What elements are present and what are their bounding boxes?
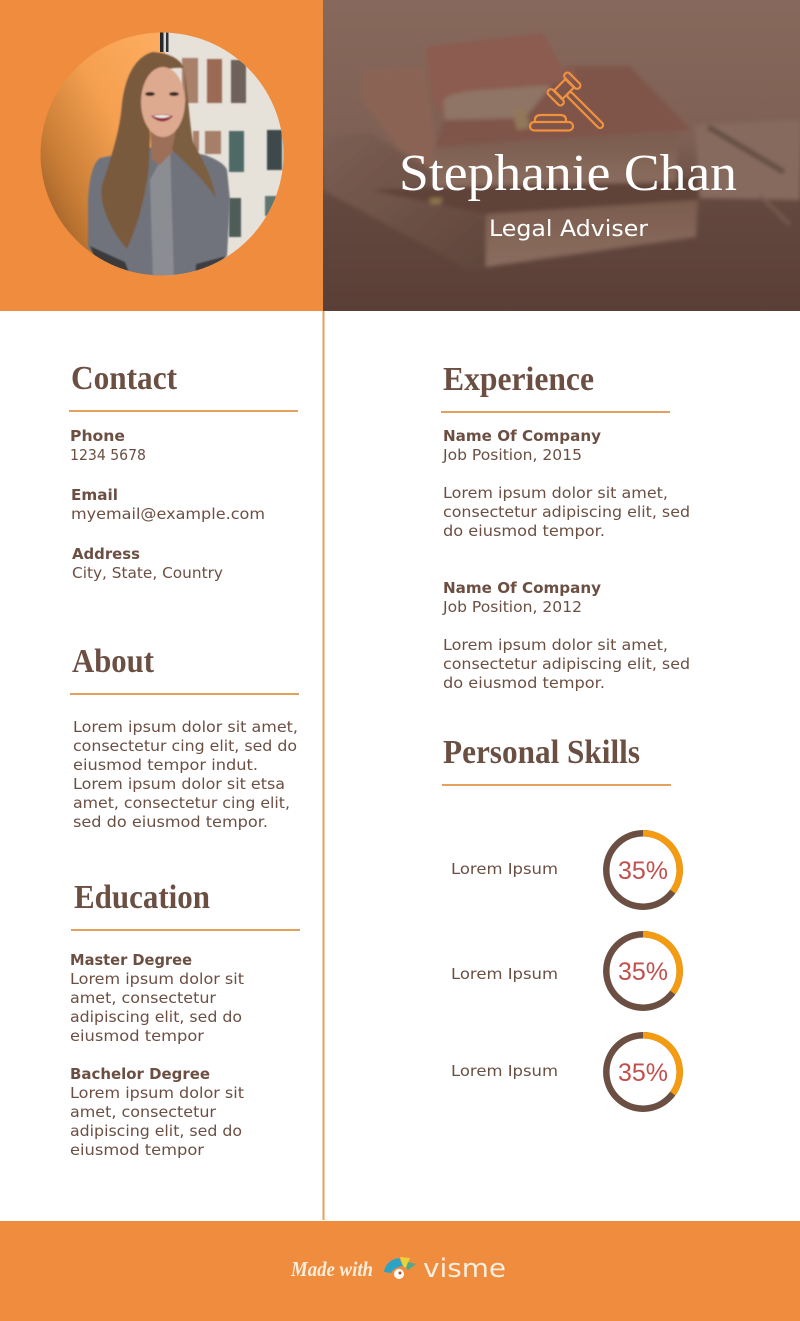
skill 3: 35% <box>618 1059 668 1087</box>
face <box>141 67 185 137</box>
skill 2: Lorem Ipsum <box>451 965 558 983</box>
education: master degree: Master Degree <box>70 951 192 969</box>
job entry 2012: Name Of Company <box>443 579 601 597</box>
education: bachelor degree: amet, consectetur <box>70 1103 217 1121</box>
education: bachelor degree <box>70 1065 244 1159</box>
panel: photo header <box>0 0 323 311</box>
background photo of books <box>323 33 800 270</box>
contact: address <box>72 545 223 582</box>
heading: education: Education <box>74 879 210 916</box>
contact: address: Address <box>72 545 140 563</box>
job entry 2012: Job Position, 2012 <box>442 598 582 616</box>
job entry 2012: do eiusmod tempor. <box>443 674 605 692</box>
portrait photo <box>40 30 286 280</box>
jacket <box>88 146 230 280</box>
job entry 2015: Lorem ipsum dolor sit amet, <box>443 484 668 502</box>
education: master degree: eiusmod tempor <box>70 1027 205 1045</box>
skill 1: Lorem Ipsum <box>451 860 558 878</box>
skill 1: 35% <box>618 857 668 885</box>
section: experience <box>441 361 690 692</box>
paper and pen <box>695 120 800 200</box>
column divider <box>322 311 324 1220</box>
job entry 2015: Name Of Company <box>443 427 601 445</box>
job entry 2012: Lorem ipsum dolor sit amet, <box>443 636 668 654</box>
education: bachelor degree: eiusmod tempor <box>70 1141 205 1159</box>
contact: email: Email <box>71 486 118 504</box>
heading: personal skills: Personal Skills <box>443 734 640 771</box>
about text: sed do eiusmod tempor. <box>73 813 268 831</box>
contact: address: City, State, Country <box>72 564 223 582</box>
education: master degree: adipiscing elit, sed do <box>70 1008 242 1026</box>
visme wordmark: visme <box>423 1254 506 1284</box>
education: master degree: Lorem ipsum dolor sit <box>70 970 244 988</box>
contact: phone <box>70 427 146 464</box>
heading: experience: Experience <box>443 361 594 398</box>
contact: email <box>71 486 265 523</box>
made with text: Made with <box>290 1257 373 1281</box>
job title: Legal Adviser <box>489 217 649 242</box>
name: Stephanie Chan <box>399 145 737 202</box>
education: bachelor degree: adipiscing elit, sed do <box>70 1122 242 1140</box>
section: education <box>70 879 300 1159</box>
contact: phone: 1234 5678 <box>70 446 146 464</box>
job entry 2012: consectetur adipiscing elit, sed <box>443 655 690 673</box>
education: bachelor degree: Bachelor Degree <box>70 1065 210 1083</box>
job entry 2015: Job Position, 2015 <box>442 446 582 464</box>
about text: eiusmod tempor indut. <box>73 756 258 774</box>
panel: name banner <box>323 0 800 311</box>
heading: about: About <box>72 643 155 680</box>
skill 3: Lorem Ipsum <box>451 1062 558 1080</box>
about text <box>73 718 298 831</box>
footer <box>0 1221 800 1321</box>
about text: amet, consectetur cing elit, <box>73 794 290 812</box>
hair <box>101 52 184 249</box>
contact: phone: Phone <box>70 427 125 445</box>
section: about <box>70 643 299 831</box>
skill 2 <box>451 934 680 1008</box>
job entry 2015 <box>442 427 690 540</box>
job entry 2012 <box>442 579 690 692</box>
education: master degree <box>70 951 244 1045</box>
job entry 2015: do eiusmod tempor. <box>443 522 605 540</box>
education: bachelor degree: Lorem ipsum dolor sit <box>70 1084 244 1102</box>
section: personal skills <box>442 734 680 1109</box>
about text: consectetur cing elit, sed do <box>73 737 297 755</box>
middle book <box>362 68 436 170</box>
icon: gavel <box>530 71 613 138</box>
job entry 2015: consectetur adipiscing elit, sed <box>443 503 690 521</box>
top book <box>428 34 574 112</box>
bottom book <box>324 173 462 244</box>
skill 2: 35% <box>618 958 668 986</box>
skill 3 <box>451 1035 680 1109</box>
neck <box>150 130 177 166</box>
skill 1 <box>451 833 680 907</box>
heading: contact: Contact <box>71 360 178 397</box>
section: contact <box>69 360 298 582</box>
education: master degree: amet, consectetur <box>70 989 217 1007</box>
contact: email: myemail@example.com <box>71 505 265 523</box>
icon: visme logo <box>384 1257 416 1279</box>
about text: Lorem ipsum dolor sit amet, <box>73 718 298 736</box>
about text: Lorem ipsum dolor sit etsa <box>73 775 285 793</box>
